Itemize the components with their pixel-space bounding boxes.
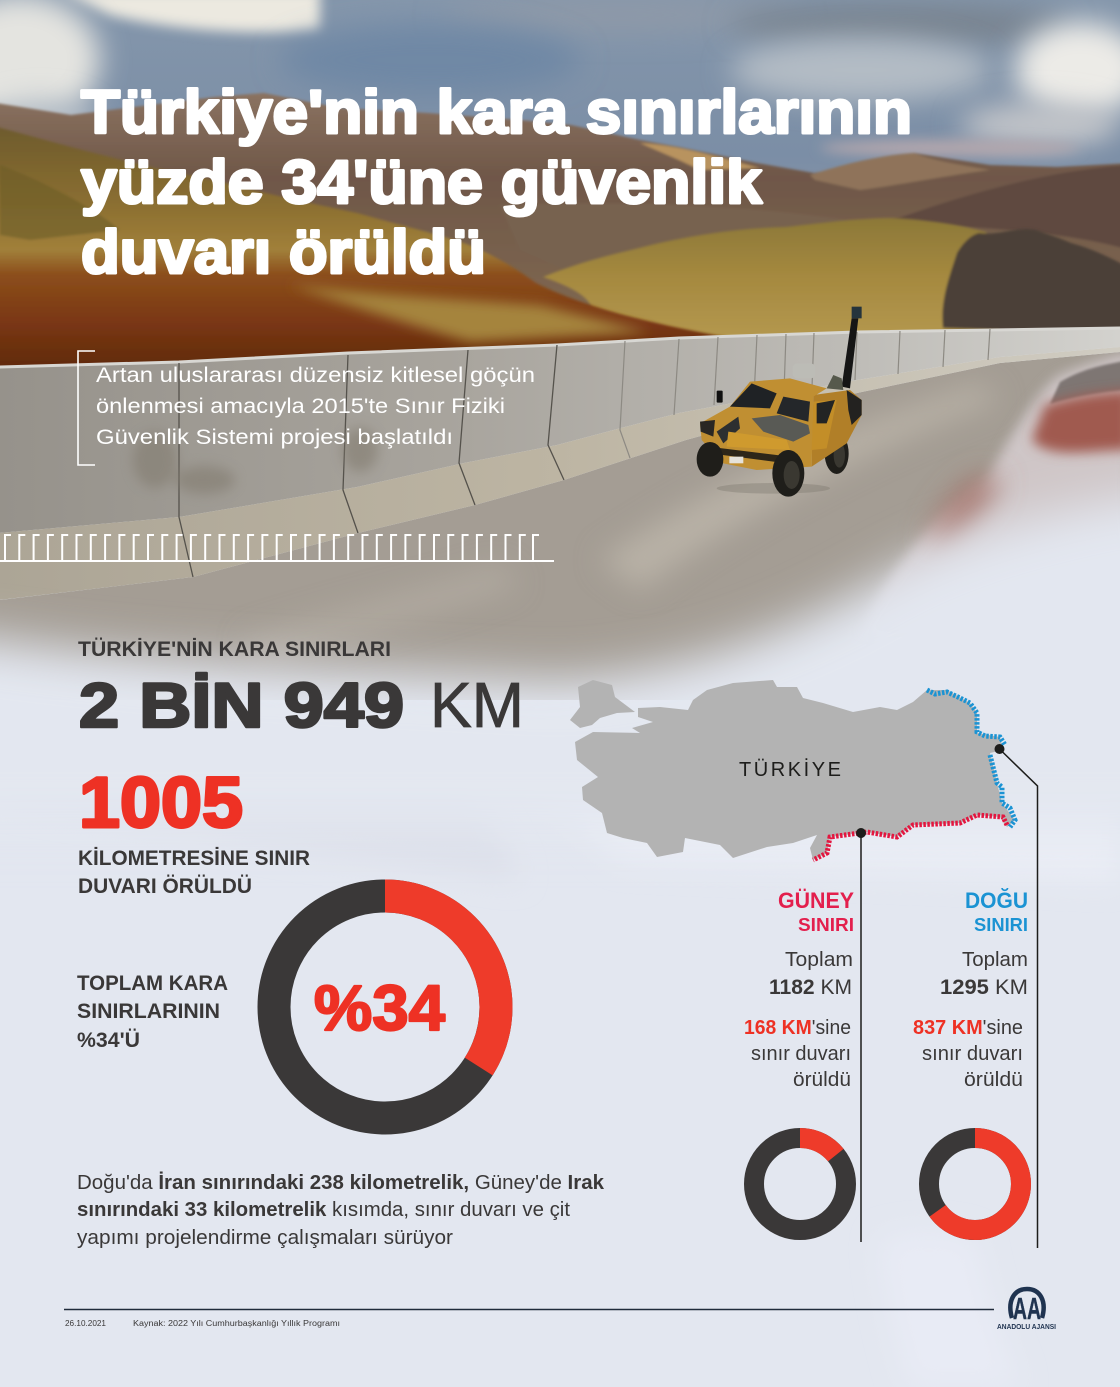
ongoing projects note: sınırındaki 33 kilometrelik kısımda, sınır duvarı ve çit	[77, 1199, 570, 1221]
headline: land border total	[78, 638, 524, 741]
intro text with bracket: önlenmesi amacıyla 2015'te Sınır Fiziki	[96, 395, 505, 418]
column: eastern border: 837 KM'sine	[913, 1017, 1023, 1039]
column: eastern border: Toplam	[962, 949, 1028, 971]
footer rule	[64, 1308, 994, 1310]
title: Türkiye'nin kara sınırlarının	[81, 78, 912, 146]
column: southern border	[744, 888, 854, 1091]
footer date and source	[65, 1319, 340, 1328]
icon: wall fence line	[0, 535, 554, 561]
headline: wall length: 1005	[79, 764, 243, 843]
photo: roadside soil	[860, 352, 1120, 640]
donut label	[77, 972, 228, 1052]
photo: concrete wall	[0, 328, 1120, 600]
photo: road	[0, 352, 1120, 700]
column: eastern border: 1295 KM	[940, 976, 1028, 999]
donut chart: 34 percent: %34	[314, 972, 445, 1044]
donut chart: eastern border	[929, 1138, 1021, 1230]
column: southern border: Toplam	[785, 949, 853, 971]
photo: armoured vehicle	[697, 307, 862, 497]
column: eastern border	[913, 888, 1028, 1091]
donut label: SINIRLARININ	[77, 1000, 220, 1023]
background map shapes	[0, 640, 1120, 1387]
headline: wall length: DUVARI ÖRÜLDÜ	[78, 875, 252, 898]
intro text with bracket: Güvenlik Sistemi projesi başlatıldı	[96, 426, 453, 449]
headline: land border total: KM	[430, 669, 524, 741]
title: yüzde 34'üne güvenlik	[81, 148, 762, 216]
intro text with bracket	[78, 351, 535, 465]
photo: fade into page background	[0, 490, 1120, 830]
headline: land border total: 2 BİN 949	[79, 671, 404, 741]
ongoing projects note: yapımı projelendirme çalışmaları sürüyor	[77, 1227, 453, 1249]
ongoing projects note: Doğu'da İran sınırındaki 238 kilometrelik, Güney'de Irak	[77, 1171, 605, 1194]
photo: foreground hill	[0, 125, 730, 375]
photo: sky and clouds	[0, 0, 1120, 260]
photo: golden hill	[543, 218, 1120, 340]
footer date and source: Kaynak: 2022 Yılı Cumhurbaşkanlığı Yıllık Programı	[133, 1319, 340, 1328]
donut label: TOPLAM KARA	[77, 972, 228, 995]
footer date and source: 26.10.2021	[65, 1319, 107, 1328]
photo: landscape with border wall	[0, 0, 1120, 830]
donut label: %34'Ü	[77, 1029, 140, 1052]
photo: wall stains	[133, 428, 378, 494]
logo: Anadolu Ajansı	[997, 1289, 1056, 1331]
column: eastern border: SINIRI	[974, 915, 1028, 935]
title: duvarı örüldü	[81, 218, 486, 286]
title	[81, 78, 912, 286]
photo: far mountains and valley	[0, 93, 1120, 340]
ongoing projects note	[77, 1171, 605, 1249]
logo: Anadolu Ajansı: AA	[1013, 1291, 1041, 1326]
headline: land border total: TÜRKİYE'NİN KARA SINIRLARI	[78, 638, 391, 661]
headline: wall length	[78, 764, 310, 898]
column: southern border: 168 KM'sine	[744, 1017, 851, 1039]
column: eastern border: örüldü	[964, 1069, 1023, 1091]
headline: wall length: KİLOMETRESİNE SINIR	[78, 847, 310, 870]
column: southern border: GÜNEY	[778, 888, 854, 913]
map of Türkiye	[570, 680, 1015, 860]
intro text with bracket: Artan uluslararası düzensiz kitlesel göçün	[96, 364, 535, 387]
map: southern border dashes	[813, 815, 1007, 860]
column: eastern border: sınır duvarı	[922, 1043, 1023, 1065]
column: southern border: sınır duvarı	[751, 1043, 851, 1065]
photo: road light streaks	[240, 385, 1000, 660]
eastern border leader line	[994, 744, 1038, 1248]
column: southern border: SINIRI	[798, 915, 854, 935]
donut chart: 34 percent	[274, 896, 496, 1118]
logo: Anadolu Ajansı: ANADOLU AJANSI	[997, 1322, 1056, 1331]
photo: dark rocks	[942, 229, 1120, 335]
map label: TÜRKİYE	[739, 758, 841, 781]
map: eastern border dashes	[927, 690, 1015, 827]
column: southern border: örüldü	[793, 1069, 851, 1091]
column: eastern border: DOĞU	[965, 888, 1028, 913]
donut chart: southern border	[754, 1138, 846, 1230]
photo: hillside golden grass	[290, 285, 650, 342]
southern border leader line	[856, 828, 866, 1242]
column: southern border: 1182 KM	[769, 976, 852, 999]
